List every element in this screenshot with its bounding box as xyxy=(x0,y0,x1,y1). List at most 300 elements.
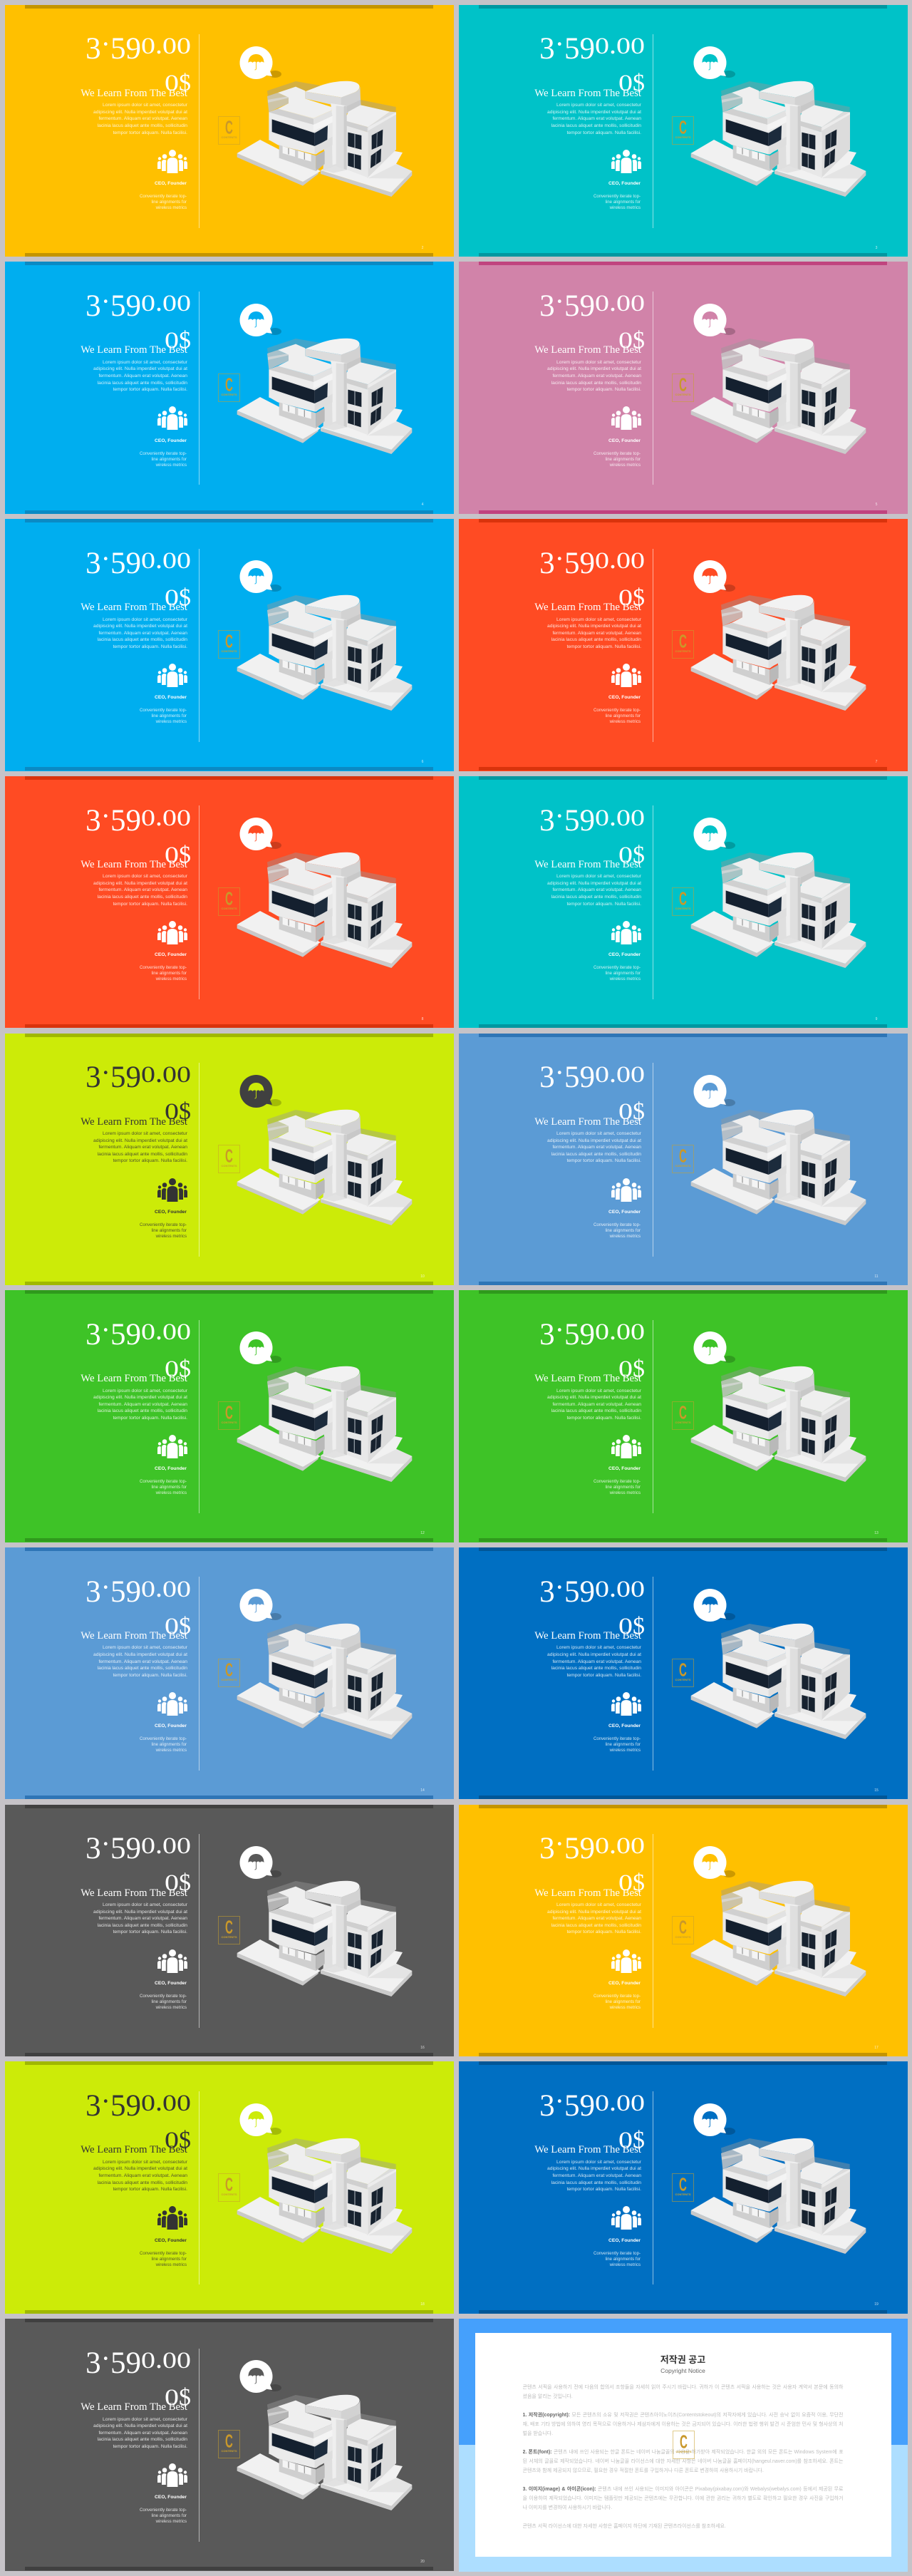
page number: 9 xyxy=(876,1017,877,1021)
panel: orange slide xyxy=(459,519,908,771)
role description: line alignments for xyxy=(152,200,187,205)
page number: 6 xyxy=(422,760,423,764)
heading: price figure: 0 xyxy=(177,1833,191,1859)
heading: price figure: 0 xyxy=(631,1575,645,1602)
bottom accent bar xyxy=(25,1796,433,1799)
subheading: We Learn From The Best xyxy=(534,1630,641,1642)
text block: lacinia lacus aliquet ante mollis, sollicitudin xyxy=(551,637,641,642)
icon: people xyxy=(611,664,641,687)
heading: price figure: $ xyxy=(179,2127,191,2153)
heading: price figure: 3·59 . xyxy=(539,2085,616,2123)
subheading: We Learn From The Best xyxy=(81,2401,187,2413)
heading: price figure: 0 xyxy=(616,804,631,830)
role description: Conveniently iterate top- xyxy=(140,1479,187,1484)
heading: price figure: 0 xyxy=(165,1098,179,1125)
heading: price figure: 0 xyxy=(141,804,155,830)
bottom accent bar xyxy=(25,1282,433,1285)
icon: people xyxy=(157,1178,187,1202)
heading: price figure: 0 xyxy=(162,804,177,830)
top accent bar xyxy=(25,2319,433,2322)
heading: price figure: 0 xyxy=(618,70,633,96)
heading: price figure: 0 xyxy=(618,1356,633,1381)
illustration: building xyxy=(691,338,866,454)
text block: tempor tortor aliquam. Nulla facilisi. xyxy=(567,1416,641,1421)
heading: price figure: $ xyxy=(633,1870,645,1896)
role label: CEO, Founder xyxy=(608,438,641,443)
illustration: building xyxy=(237,338,412,454)
bottom accent bar xyxy=(479,253,887,257)
panel: pink slide xyxy=(459,262,908,514)
text block xyxy=(502,2159,641,2193)
text block: adipiscing elit. Nulla imperdiet volutpat dui at xyxy=(93,2166,187,2171)
heading: price figure: $ xyxy=(179,1356,191,1382)
heading: price figure xyxy=(502,1825,645,1900)
icon: umbrella speech bubble xyxy=(239,2103,282,2138)
role description: line alignments for xyxy=(606,1999,641,2004)
heading: price figure: 0 xyxy=(595,2090,609,2116)
text block: lacinia lacus aliquet ante mollis, sollicitudin xyxy=(98,123,187,128)
icon: people xyxy=(611,2206,641,2230)
bottom accent bar xyxy=(479,1282,887,1285)
text block: fermentum. Aliquam erat volutpat. Aenean xyxy=(552,1916,641,1921)
role description: wireless metrics xyxy=(156,463,187,468)
role label: CEO, Founder xyxy=(608,2238,641,2243)
text block xyxy=(547,617,641,649)
text block: Lorem ipsum dolor sit amet, consectetur xyxy=(103,1131,187,1136)
subheading: We Learn From The Best xyxy=(81,1887,187,1899)
role description: Conveniently iterate top- xyxy=(140,1994,187,1999)
heading: price figure: 0 xyxy=(141,1575,155,1602)
heading: price figure: 0 xyxy=(162,1833,177,1859)
role description: Conveniently iterate top- xyxy=(594,1222,641,1227)
heading: price figure: 0 xyxy=(165,584,179,610)
heading: price figure: 3·59 . xyxy=(86,800,162,838)
text block: adipiscing elit. Nulla imperdiet volutpat dui at xyxy=(547,1652,641,1657)
text block xyxy=(47,1130,187,1165)
closing line: 콘텐츠 서픽 라이선스에 대한 자세한 사항은 홈페이지 하단에 기재된 콘텐츠라이선스를 참조하세요. xyxy=(523,2524,726,2529)
icon: people xyxy=(611,1692,641,1716)
text block: lacinia lacus aliquet ante mollis, sollicitudin xyxy=(98,1152,187,1157)
logo badge xyxy=(672,1145,694,1173)
icon: people xyxy=(157,1949,187,1973)
icon: people xyxy=(157,921,187,944)
heading: price figure: 0 xyxy=(141,1319,155,1344)
heading: price figure xyxy=(47,2340,191,2414)
bottom accent bar xyxy=(479,1024,887,1028)
icon: umbrella speech bubble xyxy=(693,818,736,852)
icon: umbrella speech bubble xyxy=(239,818,282,852)
text block: lacinia lacus aliquet ante mollis, sollicitudin xyxy=(551,1666,641,1671)
top accent bar xyxy=(479,2061,887,2065)
text block: lacinia lacus aliquet ante mollis, sollicitudin xyxy=(98,1923,187,1928)
text block: fermentum. Aliquam erat volutpat. Aenean xyxy=(98,1659,187,1664)
role label: CEO, Founder xyxy=(608,181,641,186)
heading: price figure: 0 xyxy=(631,33,645,59)
heading: price figure: 0 xyxy=(618,2127,633,2153)
text block: Lorem ipsum dolor sit amet, consectetur xyxy=(556,617,641,622)
role description xyxy=(118,2508,187,2525)
text block: Lorem ipsum dolor sit amet, consectetur xyxy=(556,1389,641,1393)
heading: price figure: 3·59 . xyxy=(86,2085,162,2123)
role label: CEO, Founder xyxy=(155,695,187,700)
text block xyxy=(47,873,187,907)
text block: Lorem ipsum dolor sit amet, consectetur xyxy=(556,1131,641,1136)
icon: umbrella speech bubble xyxy=(239,1846,282,1880)
logo badge xyxy=(672,887,694,916)
heading: price figure xyxy=(502,2083,645,2157)
text block: Lorem ipsum dolor sit amet, consectetur xyxy=(556,2160,641,2165)
text block: Lorem ipsum dolor sit amet, consectetur xyxy=(103,874,187,879)
role description: Conveniently iterate top- xyxy=(140,194,187,199)
logo badge xyxy=(218,373,240,402)
logo badge xyxy=(672,116,694,145)
role description xyxy=(140,194,187,210)
text block: adipiscing elit. Nulla imperdiet volutpat dui at xyxy=(547,1910,641,1915)
logo badge xyxy=(218,630,240,659)
role description xyxy=(140,451,187,468)
page number: 17 xyxy=(874,2046,879,2050)
heading: price figure: 0 xyxy=(618,327,633,354)
role description: line alignments for xyxy=(152,713,187,718)
heading: price figure xyxy=(502,1312,645,1386)
text block: Lorem ipsum dolor sit amet, consectetur xyxy=(103,103,187,108)
clause 2 line 2: 된 서체의 글꼴로 제작되었습니다. 네이버 나눔글꼴 라이선스에 대한 자세한 사항은 네이버 나눔글꼴 홈페이지(hangeul.naver.com)를 참조하세요. 폰트는 xyxy=(523,2459,844,2464)
panel: green slide xyxy=(4,1290,453,1542)
illustration: building xyxy=(207,1571,435,1742)
heading: price figure xyxy=(47,798,191,872)
subheading: We Learn From The Best xyxy=(534,1116,641,1128)
role description: wireless metrics xyxy=(156,719,187,724)
illustration: building xyxy=(691,81,866,197)
text block: tempor tortor aliquam. Nulla facilisi. xyxy=(113,130,187,135)
top accent bar xyxy=(25,1034,433,1036)
clause 1 line 3: 벌을 받습니다. xyxy=(523,2431,553,2436)
role label: CEO, Founder xyxy=(155,438,187,443)
heading: price figure: $ xyxy=(633,842,645,868)
icon: umbrella speech bubble xyxy=(693,1331,736,1366)
heading: price figure xyxy=(539,28,645,96)
page number: 14 xyxy=(420,1788,425,1793)
intro text line 2: 셨음을 알리는 것입니다. xyxy=(523,2394,573,2399)
text block xyxy=(47,1644,187,1679)
illustration: building xyxy=(207,1057,435,1228)
text block: Lorem ipsum dolor sit amet, consectetur xyxy=(103,1645,187,1650)
icon: umbrella speech bubble xyxy=(693,1075,736,1109)
page number: 4 xyxy=(422,503,423,507)
logo badge xyxy=(218,1916,240,1944)
heading: price figure: $ xyxy=(179,327,191,354)
role description: wireless metrics xyxy=(156,1234,187,1239)
subheading: We Learn From The Best xyxy=(81,2144,187,2155)
text block xyxy=(502,1130,641,1165)
intro text: 콘텐츠 서픽을 사용하기 전에 다음의 합의서 조항들을 자세히 읽어 주시기 바랍니다. 귀하가 이 콘텐츠 서픽을 사용하는 것은 사용자 계약서 본문에 동의하 xyxy=(523,2385,844,2390)
page number: 13 xyxy=(874,1531,879,1535)
role description: Conveniently iterate top- xyxy=(594,708,641,713)
heading: price figure: 3·59 . xyxy=(539,800,616,838)
text block: fermentum. Aliquam erat volutpat. Aenean xyxy=(552,1402,641,1407)
role description: line alignments for xyxy=(606,200,641,205)
heading: price figure: 0 xyxy=(631,1319,645,1344)
role description: Conveniently iterate top- xyxy=(140,2251,187,2256)
subheading: We Learn From The Best xyxy=(534,859,641,870)
role description xyxy=(594,194,641,210)
heading: price figure: 0 xyxy=(631,290,645,316)
subheading: We Learn From The Best xyxy=(534,1887,641,1899)
role description: Conveniently iterate top- xyxy=(594,965,641,970)
text block: adipiscing elit. Nulla imperdiet volutpat dui at xyxy=(93,1652,187,1657)
heading: price figure: 0 xyxy=(141,2090,155,2116)
heading: price figure: 3·59 . xyxy=(86,1571,162,1609)
text block: tempor tortor aliquam. Nulla facilisi. xyxy=(113,902,187,907)
top accent bar xyxy=(25,5,433,9)
top accent bar xyxy=(479,519,887,522)
role description: wireless metrics xyxy=(156,2005,187,2010)
heading: price figure xyxy=(539,285,645,354)
heading: price figure xyxy=(502,1054,645,1128)
role label: CEO, Founder xyxy=(155,2495,187,2500)
text block: fermentum. Aliquam erat volutpat. Aenean xyxy=(552,631,641,636)
heading: price figure: 0 xyxy=(595,290,609,316)
text block: fermentum. Aliquam erat volutpat. Aenean xyxy=(98,1145,187,1150)
top accent bar xyxy=(25,519,433,522)
role description xyxy=(594,451,641,468)
role label: CEO, Founder xyxy=(608,695,641,700)
heading: price figure: 0 xyxy=(616,1833,631,1859)
illustration: building xyxy=(207,1828,435,1999)
heading: price figure: 3·59 . xyxy=(86,1314,162,1351)
role description: wireless metrics xyxy=(610,2262,641,2267)
heading: price figure: 0 xyxy=(165,1612,179,1639)
subheading: We Learn From The Best xyxy=(534,88,641,99)
icon: people xyxy=(611,1178,641,1202)
text block: fermentum. Aliquam erat volutpat. Aenean xyxy=(98,1916,187,1921)
heading: price figure: 0 xyxy=(162,547,177,573)
text block xyxy=(93,103,187,135)
heading: price figure xyxy=(47,2083,191,2157)
heading: price figure: 0 xyxy=(141,547,155,573)
panel: teal slide xyxy=(459,5,908,257)
text block: Lorem ipsum dolor sit amet, consectetur xyxy=(556,1645,641,1650)
heading: price figure xyxy=(502,798,645,872)
heading: price figure: 0 xyxy=(595,547,609,573)
text block: adipiscing elit. Nulla imperdiet volutpat dui at xyxy=(547,110,641,115)
text block: adipiscing elit. Nulla imperdiet volutpat dui at xyxy=(93,1910,187,1915)
page number: 10 xyxy=(420,1274,425,1279)
top accent bar xyxy=(479,5,887,9)
text block: Lorem ipsum dolor sit amet, consectetur xyxy=(103,360,187,365)
bottom accent bar xyxy=(25,2053,433,2056)
text block: lacinia lacus aliquet ante mollis, sollicitudin xyxy=(98,895,187,900)
text block: lacinia lacus aliquet ante mollis, sollicitudin xyxy=(98,1666,187,1671)
role label: CEO, Founder xyxy=(155,181,187,186)
heading: price figure: 3·59 . xyxy=(86,542,162,580)
heading: price figure: 0 xyxy=(177,1061,191,1088)
illustration: building xyxy=(660,1314,888,1485)
role description: wireless metrics xyxy=(610,205,641,210)
text block: fermentum. Aliquam erat volutpat. Aenean xyxy=(552,116,641,121)
text block: adipiscing elit. Nulla imperdiet volutpat dui at xyxy=(93,1138,187,1143)
heading: price figure: 0 xyxy=(631,804,645,830)
heading: price figure: 0 xyxy=(177,33,191,59)
role description: Conveniently iterate top- xyxy=(140,1736,187,1741)
logo badge xyxy=(672,1659,694,1687)
text block: tempor tortor aliquam. Nulla facilisi. xyxy=(113,1673,187,1678)
illustration: building xyxy=(237,81,412,197)
text block: fermentum. Aliquam erat volutpat. Aenean xyxy=(98,887,187,892)
text block: Lorem ipsum dolor sit amet, consectetur xyxy=(103,2160,187,2165)
heading: price figure: 3·59 . xyxy=(539,1314,616,1351)
role description: wireless metrics xyxy=(156,2262,187,2267)
heading: price figure: 0 xyxy=(616,1575,631,1602)
logo badge xyxy=(672,2173,694,2202)
text block: fermentum. Aliquam erat volutpat. Aenean xyxy=(98,116,187,121)
role label: CEO, Founder xyxy=(608,952,641,957)
role label: CEO, Founder xyxy=(155,1466,187,1471)
role description: Conveniently iterate top- xyxy=(140,965,187,970)
page number: 15 xyxy=(874,1788,879,1793)
bottom accent bar xyxy=(479,2310,887,2314)
subheading: We Learn From The Best xyxy=(81,1630,187,1642)
bottom accent bar xyxy=(479,1538,887,1542)
text block: lacinia lacus aliquet ante mollis, sollicitudin xyxy=(551,1408,641,1413)
text block: Lorem ipsum dolor sit amet, consectetur xyxy=(103,1389,187,1393)
illustration: building xyxy=(660,1571,888,1742)
role label: CEO, Founder xyxy=(608,1981,641,1986)
heading: price figure: 0 xyxy=(162,2346,177,2373)
text block: fermentum. Aliquam erat volutpat. Aenean xyxy=(98,631,187,636)
text block: Lorem ipsum dolor sit amet, consectetur xyxy=(103,617,187,622)
heading: price figure: 0 xyxy=(177,1319,191,1344)
role description: wireless metrics xyxy=(610,719,641,724)
heading: price figure: 0 xyxy=(177,290,191,316)
top accent bar xyxy=(25,262,433,265)
icon: people xyxy=(611,921,641,944)
heading: price figure: 0 xyxy=(165,841,179,867)
text block: fermentum. Aliquam erat volutpat. Aenean xyxy=(552,373,641,378)
text block: Lorem ipsum dolor sit amet, consectetur xyxy=(556,360,641,365)
heading: price figure: 0 xyxy=(177,1575,191,1602)
text block xyxy=(502,1902,641,1936)
text block: adipiscing elit. Nulla imperdiet volutpat dui at xyxy=(547,624,641,629)
heading: price figure: $ xyxy=(633,1098,645,1125)
clause 1 line 2: 재, 배포 기타 방법에 의하여 영리 목적으로 이용하거나 제삼자에게 이용하는 것은 금지되어 있습니다. 이러한 법령 행위 발견 시 준엄한 민사 및 형사상의 처 xyxy=(523,2422,844,2427)
heading: price figure: 0 xyxy=(165,327,179,354)
panel: teal slide xyxy=(459,776,908,1028)
heading: price figure: 3·59 . xyxy=(539,28,616,66)
text block: tempor tortor aliquam. Nulla facilisi. xyxy=(113,1930,187,1934)
heading: price figure: 0 xyxy=(162,1061,177,1088)
role description xyxy=(118,965,187,982)
role description xyxy=(118,1736,187,1753)
icon: umbrella speech bubble xyxy=(694,46,735,79)
bottom accent bar xyxy=(479,510,887,514)
subheading: We Learn From The Best xyxy=(534,1373,641,1384)
text block xyxy=(547,103,641,135)
text block: tempor tortor aliquam. Nulla facilisi. xyxy=(567,2187,641,2192)
panel: dark grey slide xyxy=(4,1805,453,2056)
heading: price figure: 0 xyxy=(162,2090,177,2116)
heading: price figure: 0 xyxy=(595,804,609,830)
text block: adipiscing elit. Nulla imperdiet volutpat dui at xyxy=(93,110,187,115)
heading: price figure: 0 xyxy=(616,290,631,316)
heading: price figure: 3·59 . xyxy=(539,542,616,580)
heading: price figure: 0 xyxy=(631,1833,645,1859)
text block: fermentum. Aliquam erat volutpat. Aenean xyxy=(98,1402,187,1407)
heading: price figure: 0 xyxy=(616,1061,631,1088)
bottom accent bar xyxy=(25,510,433,514)
subheading: We Learn From The Best xyxy=(81,88,187,99)
text block: fermentum. Aliquam erat volutpat. Aenean xyxy=(98,373,187,378)
heading: price figure: 3·59 . xyxy=(86,1056,162,1094)
role description: Conveniently iterate top- xyxy=(140,1222,187,1227)
logo badge xyxy=(673,2431,694,2459)
bottom accent bar xyxy=(479,767,887,771)
logo badge xyxy=(218,1401,240,1430)
text block xyxy=(47,1388,187,1422)
heading: price figure: 0 xyxy=(595,1833,609,1859)
heading: price figure: 3·59 . xyxy=(539,1056,616,1094)
text block: fermentum. Aliquam erat volutpat. Aenean xyxy=(552,887,641,892)
role description: line alignments for xyxy=(152,971,187,976)
icon: people xyxy=(611,1435,641,1458)
text block: lacinia lacus aliquet ante mollis, sollicitudin xyxy=(98,637,187,642)
panel: blue slide xyxy=(4,262,453,514)
text block: tempor tortor aliquam. Nulla facilisi. xyxy=(113,2444,187,2449)
role description xyxy=(118,2251,187,2268)
role label: CEO, Founder xyxy=(155,1210,187,1215)
heading: price figure: 0 xyxy=(141,2346,155,2373)
role description: line alignments for xyxy=(152,457,187,462)
illustration: building xyxy=(660,2086,888,2257)
heading: price figure: 3·59 . xyxy=(539,1571,616,1609)
notice title: 저작권 공고 xyxy=(660,2354,705,2365)
role label: CEO, Founder xyxy=(155,2238,187,2243)
panel: steel blue slide xyxy=(4,1547,453,1799)
role label: CEO, Founder xyxy=(608,1210,641,1215)
top accent bar xyxy=(479,1290,887,1294)
heading: price figure: 0 xyxy=(177,547,191,573)
text block xyxy=(502,1388,641,1422)
text block: Lorem ipsum dolor sit amet, consectetur xyxy=(556,874,641,879)
icon: people xyxy=(157,406,187,430)
top accent bar xyxy=(25,1805,433,1808)
panel: dark blue slide xyxy=(459,2061,908,2314)
icon: umbrella speech bubble xyxy=(239,46,281,79)
role description: wireless metrics xyxy=(610,1748,641,1753)
heading: price figure xyxy=(47,1312,191,1386)
heading: price figure: $ xyxy=(179,70,191,96)
text block: tempor tortor aliquam. Nulla facilisi. xyxy=(113,2187,187,2192)
text block: lacinia lacus aliquet ante mollis, sollicitudin xyxy=(551,123,641,128)
icon: umbrella speech bubble xyxy=(239,2360,282,2394)
role description: line alignments for xyxy=(606,2257,641,2262)
heading: price figure: 0 xyxy=(141,290,155,316)
top accent bar xyxy=(25,776,433,780)
heading: price figure: 0 xyxy=(177,2090,191,2116)
role description: line alignments for xyxy=(606,1742,641,1747)
heading: price figure: 0 xyxy=(177,804,191,830)
icon: people xyxy=(157,1692,187,1716)
text block: Lorem ipsum dolor sit amet, consectetur xyxy=(556,1902,641,1907)
role label: CEO, Founder xyxy=(155,1724,187,1729)
text block: adipiscing elit. Nulla imperdiet volutpat dui at xyxy=(547,366,641,371)
role description: line alignments for xyxy=(606,1228,641,1233)
illustration: building xyxy=(660,800,888,971)
heading: price figure xyxy=(47,1825,191,1900)
panel: copyright notice xyxy=(459,2319,908,2572)
heading: price figure: 0 xyxy=(162,1575,177,1602)
icon: umbrella speech bubble xyxy=(239,1331,282,1366)
